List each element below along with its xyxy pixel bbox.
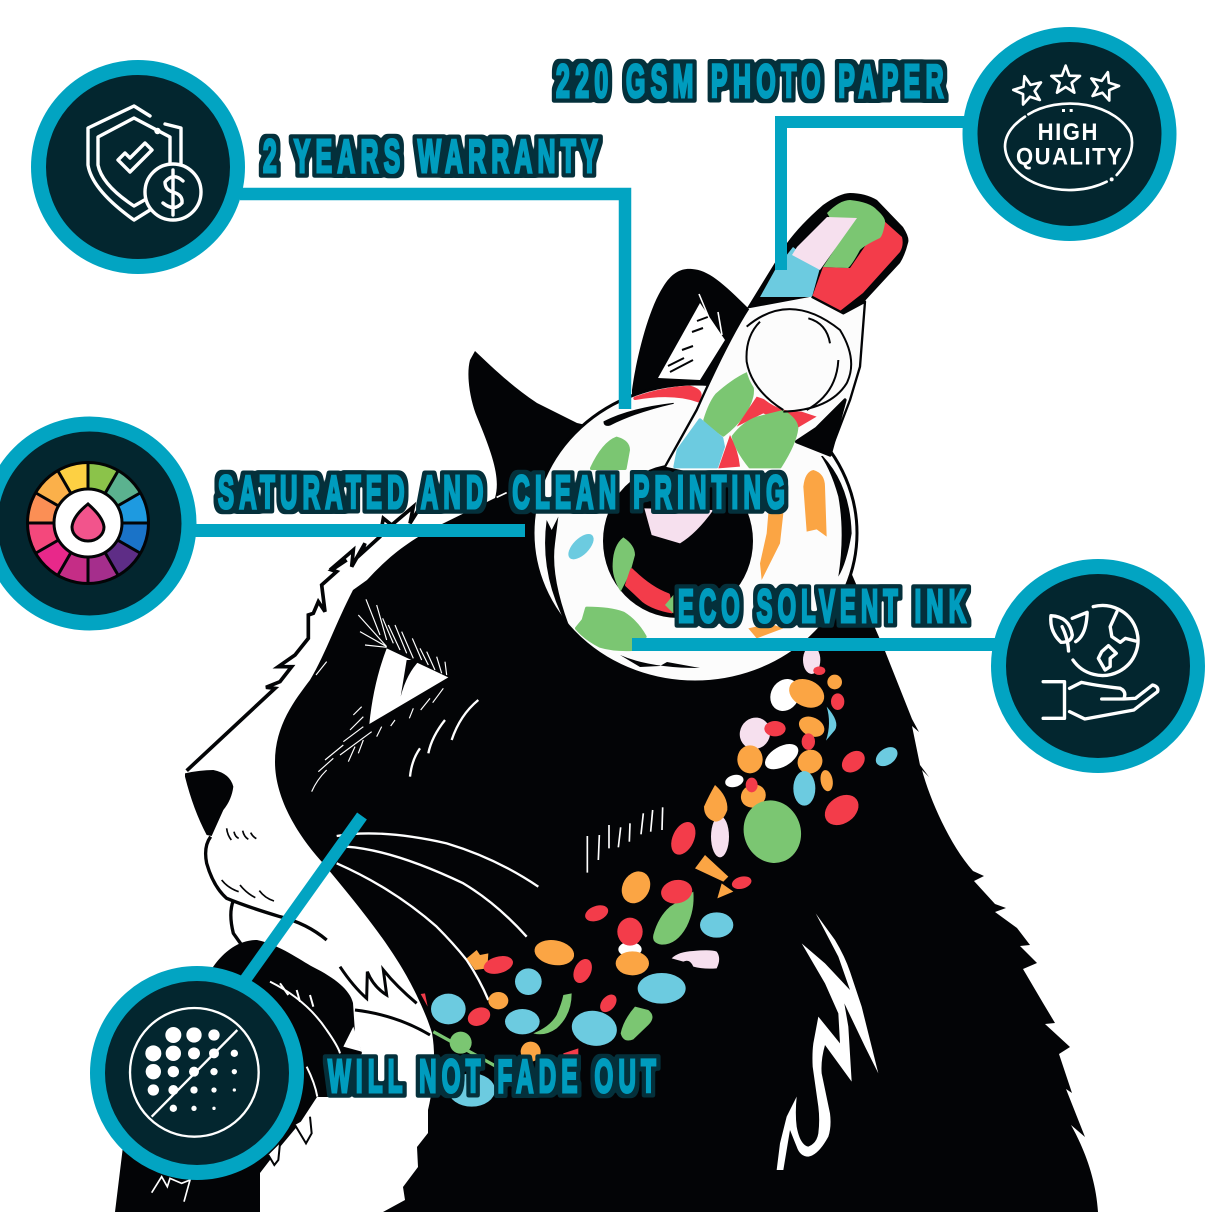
paint splatter spots on the cat bbox=[421, 646, 901, 1107]
badge: will not fade out bbox=[98, 974, 296, 1172]
label: will not fade out: WILL NOT FADE OUT bbox=[328, 1050, 661, 1102]
icon: colour wheel with ink drop bbox=[24, 459, 152, 587]
icon: hand holding globe and leaf bbox=[1043, 605, 1158, 719]
icon: shield with dollar coin bbox=[88, 106, 201, 220]
connector line: will not fade out bbox=[245, 816, 362, 980]
icon: stars and high quality seal: HIGH bbox=[1038, 119, 1099, 146]
badge: warranty bbox=[38, 68, 238, 266]
cat paw and shoulder bbox=[115, 940, 362, 1212]
connector line: eco solvent ink bbox=[632, 638, 997, 651]
connector line: warranty bbox=[240, 194, 625, 409]
badge: colour wheel bbox=[0, 424, 189, 623]
white fur lightning on chest bbox=[777, 913, 878, 1170]
cat head and body silhouette bbox=[275, 351, 1098, 1212]
cat back ear bbox=[632, 269, 760, 420]
connector line: saturated printing bbox=[190, 524, 525, 537]
fur lines on paw bbox=[152, 967, 430, 1202]
badge: high quality bbox=[970, 34, 1169, 234]
icon: stars and high quality seal: QUALITY bbox=[1016, 143, 1123, 170]
badge: eco solvent ink bbox=[998, 566, 1198, 766]
icon: stars and high quality seal bbox=[1005, 66, 1132, 190]
headband strap with paint bbox=[747, 193, 908, 315]
cat muzzle, nose, eye and whiskers bbox=[185, 560, 538, 1000]
headband hinge and paint blobs bbox=[665, 297, 865, 473]
headphones bbox=[533, 193, 908, 682]
connector line: photo paper bbox=[781, 122, 970, 270]
label: 2 years warranty: 2 YEARS WARRANTY bbox=[263, 130, 603, 182]
icon: fading halftone dots crossed out bbox=[130, 1008, 259, 1137]
left ear cup ring bbox=[533, 384, 857, 682]
fur jag along forehead bbox=[330, 493, 507, 570]
